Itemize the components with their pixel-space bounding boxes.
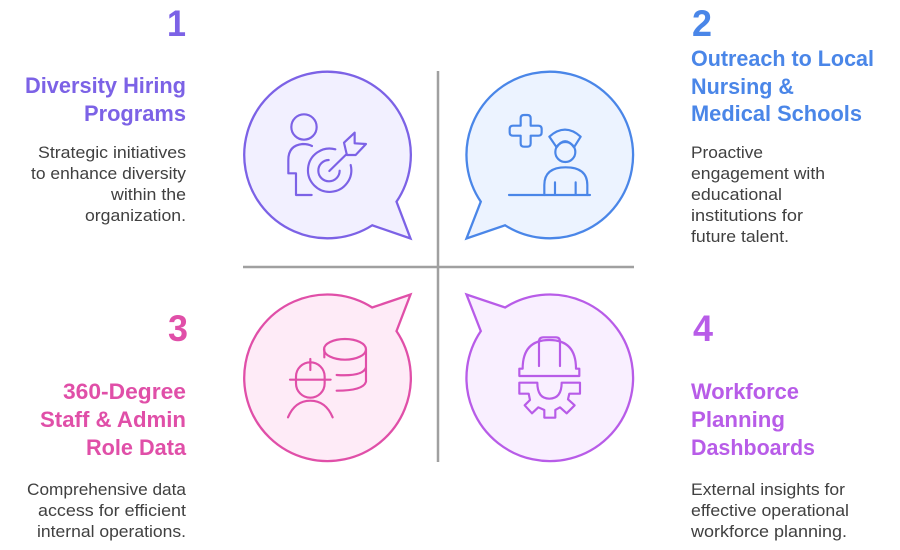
icon: hard hat with gear bbox=[519, 337, 580, 418]
description: diversity hiring: organization. bbox=[85, 206, 186, 225]
description: outreach bbox=[691, 143, 825, 246]
heading: diversity hiring programs: Programs bbox=[84, 101, 186, 126]
description: dashboards: effective operational bbox=[691, 501, 849, 520]
panel: diversity hiring programs bbox=[25, 3, 411, 238]
description: outreach: educational bbox=[691, 185, 782, 204]
number 1: 1 bbox=[167, 3, 186, 44]
description: outreach: future talent. bbox=[691, 227, 789, 246]
description: outreach: institutions for bbox=[691, 206, 803, 225]
description: outreach: Proactive bbox=[691, 143, 763, 162]
description: outreach: engagement with bbox=[691, 164, 825, 183]
quadrant divider lines bbox=[243, 71, 634, 462]
description: diversity hiring: to enhance diversity bbox=[31, 164, 187, 183]
heading: outreach to local nursing and medical schools: Outreach to Local bbox=[691, 46, 874, 71]
description: diversity hiring bbox=[31, 143, 187, 225]
speech bubble: violet bbox=[466, 294, 633, 461]
panel: staff and admin role data bbox=[27, 294, 411, 541]
heading: workforce planning dashboards: Planning bbox=[691, 407, 785, 432]
number 2: 2 bbox=[692, 3, 712, 44]
description: role data: Comprehensive data bbox=[27, 480, 187, 499]
number 4: 4 bbox=[693, 308, 713, 349]
heading: workforce planning dashboards: Workforce bbox=[691, 379, 799, 404]
panel: workforce planning dashboards bbox=[466, 294, 849, 541]
heading: workforce planning dashboards: Dashboards bbox=[691, 435, 815, 460]
heading: 360-degree staff and admin role data: 360-Degree bbox=[63, 379, 186, 404]
description: dashboards bbox=[690, 480, 849, 541]
heading: outreach to local nursing and medical schools bbox=[691, 46, 874, 126]
icon: worker with database bbox=[288, 339, 366, 417]
speech bubble: blue bbox=[466, 72, 633, 238]
icon: person with target and arrow bbox=[288, 114, 366, 195]
description: dashboards: workforce planning. bbox=[690, 522, 847, 541]
heading: 360-degree staff and admin role data bbox=[40, 379, 186, 460]
description: role data: internal operations. bbox=[37, 522, 186, 541]
description: dashboards: External insights for bbox=[691, 480, 845, 499]
heading: workforce planning dashboards bbox=[691, 379, 815, 460]
description: role data: access for efficient bbox=[38, 501, 186, 520]
heading: diversity hiring programs bbox=[25, 73, 186, 126]
heading: 360-degree staff and admin role data: Role Data bbox=[86, 435, 186, 460]
heading: outreach to local nursing and medical schools: Nursing & bbox=[691, 74, 794, 99]
number 3: 3 bbox=[168, 308, 188, 349]
speech bubble: pink bbox=[244, 294, 411, 461]
panel: outreach to local schools bbox=[466, 3, 874, 246]
icon: nurse with medical cross bbox=[509, 115, 590, 195]
description: diversity hiring: Strategic initiatives bbox=[38, 143, 186, 162]
description: role data bbox=[27, 480, 187, 541]
description: diversity hiring: within the bbox=[110, 185, 186, 204]
heading: 360-degree staff and admin role data: Staff & Admin bbox=[40, 407, 186, 432]
heading: outreach to local nursing and medical schools: Medical Schools bbox=[691, 101, 862, 126]
heading: diversity hiring programs: Diversity Hiring bbox=[25, 73, 186, 98]
speech bubble: purple bbox=[244, 72, 411, 238]
